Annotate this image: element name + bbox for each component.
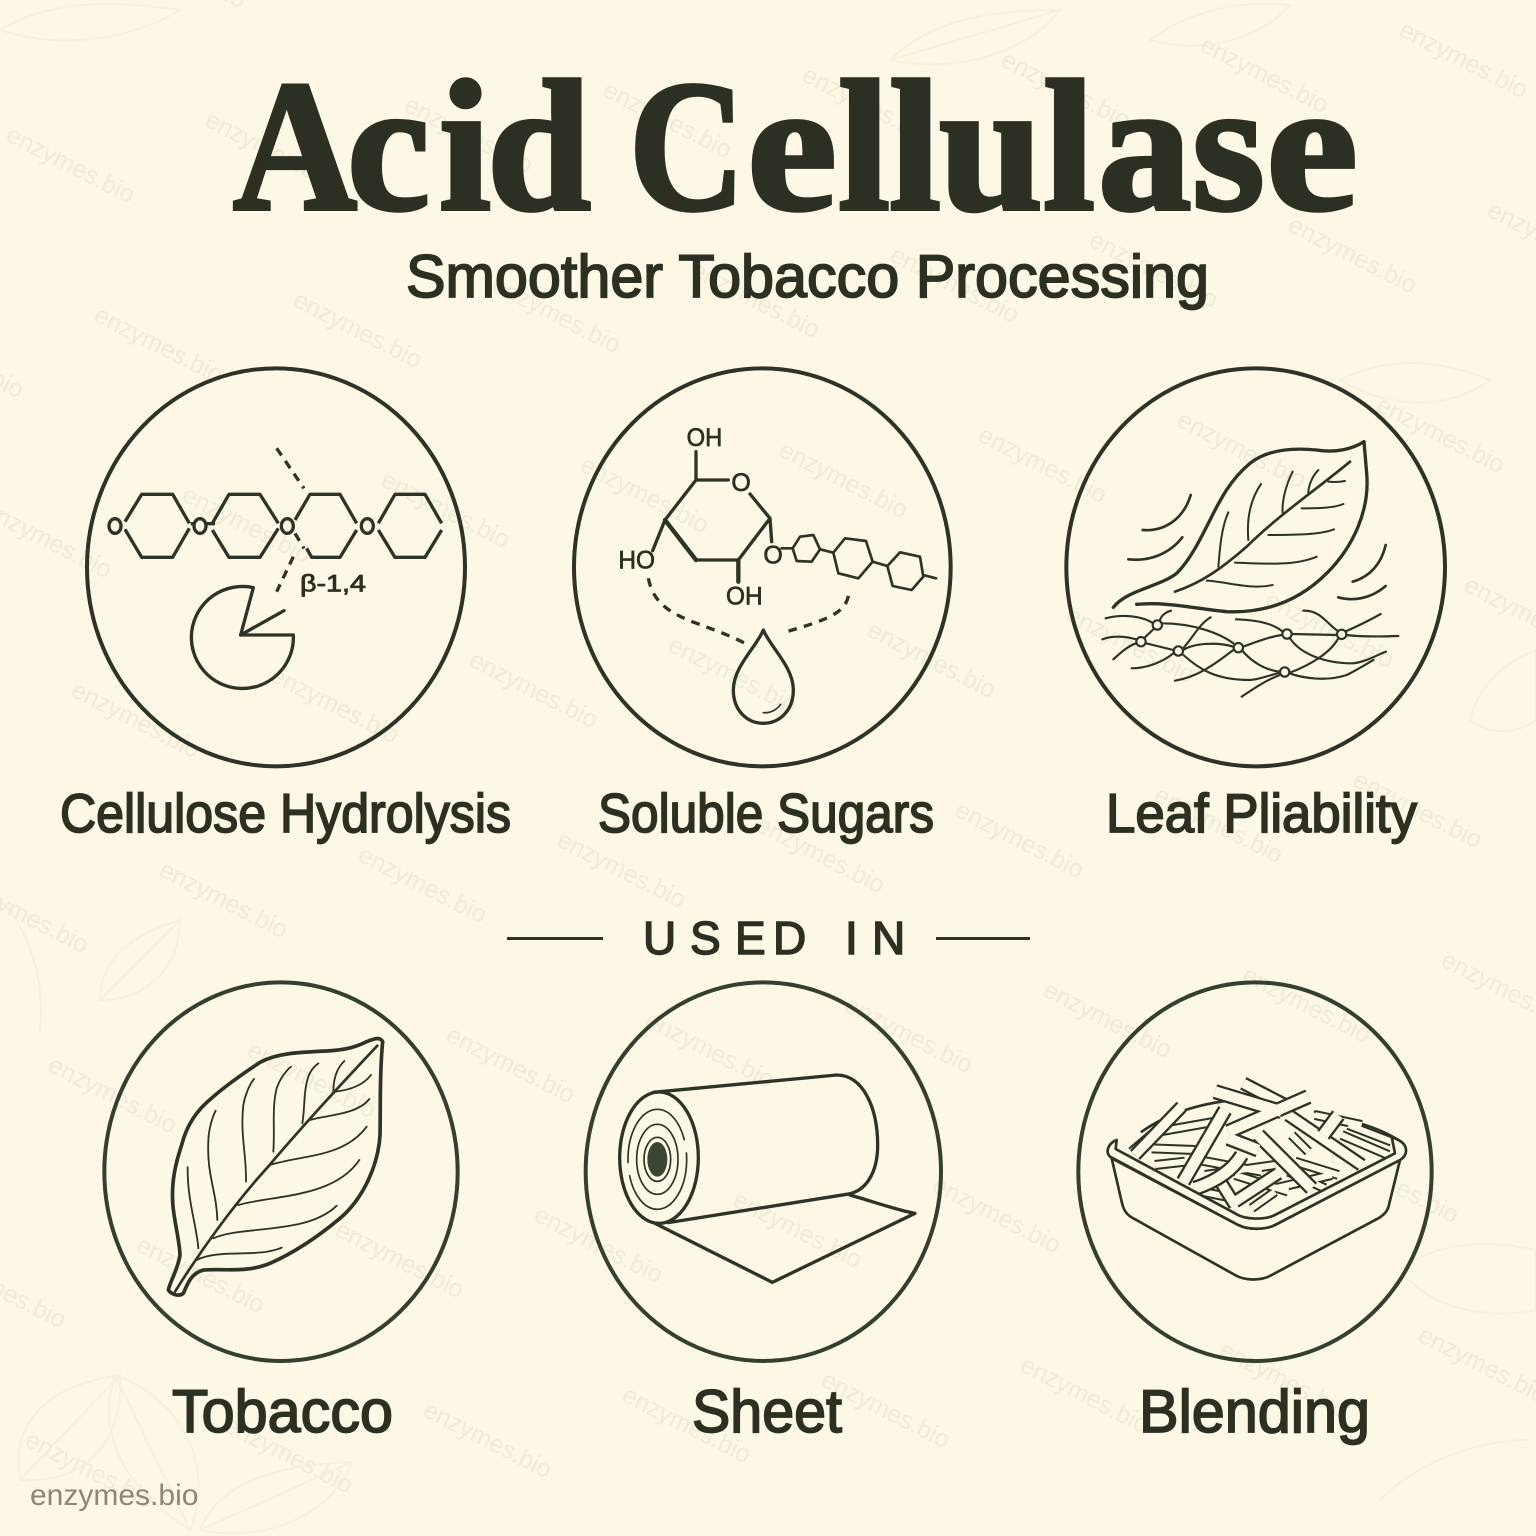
watermark pattern: enzymes.bio <box>840 991 978 1079</box>
icon: sugar molecule and water drop: O <box>731 469 751 497</box>
watermark pattern: enzymes.bio <box>1284 211 1422 299</box>
title: e <box>747 43 837 250</box>
watermark pattern: enzymes.bio <box>400 91 538 179</box>
watermark pattern: enzymes.bio <box>576 451 714 539</box>
watermark pattern: enzymes.bio <box>2 121 140 209</box>
watermark pattern: enzymes.bio <box>1326 1141 1464 1229</box>
watermark pattern: enzymes.bio <box>1395 16 1533 104</box>
watermark pattern: enzymes.bio <box>354 841 492 929</box>
watermark pattern: enzymes.bio <box>974 421 1112 509</box>
title: C <box>629 43 745 250</box>
watermark pattern: enzymes.bio <box>132 1231 270 1319</box>
icon: rolled sheet <box>586 982 941 1361</box>
watermark pattern: enzymes.bio <box>618 1381 756 1469</box>
watermark pattern: enzymes.bio <box>419 1396 557 1484</box>
watermark pattern: enzymes.bio <box>928 1171 1066 1259</box>
icon: flexing leaf over fibre network <box>1066 368 1445 766</box>
watermark pattern: enzymes.bio <box>687 256 825 344</box>
panel: soluble sugars <box>574 368 951 844</box>
watermark pattern: enzymes.bio <box>1349 766 1487 854</box>
icon: cellulose chain and enzyme: β-1,4 <box>300 571 366 598</box>
watermark pattern: enzymes.bio <box>1173 406 1311 494</box>
icon: sugar molecule and water drop <box>574 368 951 766</box>
panel: blending <box>1078 982 1432 1445</box>
brand mark: enzymes.bio <box>30 1479 198 1512</box>
watermark pattern: enzymes.bio <box>1150 781 1288 869</box>
watermark pattern: enzymes.bio <box>599 76 737 164</box>
watermark pattern: enzymes.bio <box>1016 1351 1154 1439</box>
watermark pattern: enzymes.bio <box>21 1426 159 1514</box>
watermark pattern: enzymes.bio <box>530 1201 668 1289</box>
panel: sheet <box>586 982 941 1445</box>
panel: leaf pliability <box>1066 368 1445 844</box>
watermark pattern: enzymes.bio <box>488 271 626 359</box>
title <box>233 43 1358 250</box>
icon: sugar molecule and water drop: OH <box>726 582 763 610</box>
icon: tray of shredded tobacco <box>1078 982 1432 1361</box>
watermark pattern: enzymes.bio <box>201 106 339 194</box>
watermark pattern: enzymes.bio <box>664 631 802 719</box>
title: cid <box>347 43 591 250</box>
label: blending: Blending <box>1139 1378 1370 1445</box>
watermark pattern: enzymes.bio <box>1372 391 1510 479</box>
watermark pattern: enzymes.bio <box>1196 31 1334 119</box>
watermark pattern: enzymes.bio <box>178 481 316 569</box>
label: leaf pliability: Leaf Pliability <box>1106 782 1417 844</box>
watermark pattern: enzymes.bio <box>67 676 205 764</box>
watermark pattern: enzymes.bio <box>243 1036 381 1124</box>
watermark pattern: enzymes.bio <box>1085 226 1223 314</box>
watermark pattern: enzymes.bio <box>266 661 404 749</box>
label: tobacco: Tobacco <box>172 1378 393 1445</box>
watermark pattern: enzymes.bio <box>641 1006 779 1094</box>
watermark pattern: enzymes.bio <box>729 1186 867 1274</box>
divider heading: used in: USED IN <box>643 912 905 964</box>
watermark pattern: enzymes.bio <box>1062 601 1200 689</box>
watermark pattern: enzymes.bio <box>155 856 293 944</box>
watermark pattern: enzymes.bio <box>997 46 1135 134</box>
watermark pattern: enzymes.bio <box>377 466 515 554</box>
icon: sugar molecule and water drop: HO <box>618 546 655 574</box>
title: A <box>233 43 357 250</box>
watermark pattern: enzymes.bio <box>863 616 1001 704</box>
watermark pattern: enzymes.bio <box>44 1051 182 1139</box>
watermark pattern: enzymes.bio <box>331 1216 469 1304</box>
title: llulas <box>838 43 1265 250</box>
icon: sugar molecule and water drop: OH <box>687 424 722 452</box>
watermark pattern: enzymes.bio <box>220 1411 358 1499</box>
watermark pattern: enzymes.bio <box>1238 961 1376 1049</box>
watermark pattern: enzymes.bio <box>553 826 691 914</box>
watermark pattern: enzymes.bio <box>1127 1156 1265 1244</box>
watermark pattern: enzymes.bio <box>90 301 228 389</box>
label: sheet: Sheet <box>692 1378 842 1445</box>
title: e <box>1266 43 1358 250</box>
watermark pattern: enzymes.bio <box>1215 1336 1353 1424</box>
panel: tobacco <box>104 982 458 1445</box>
watermark pattern: enzymes.bio <box>465 646 603 734</box>
icon: tobacco leaf <box>104 982 458 1361</box>
watermark pattern: enzymes.bio <box>951 796 1089 884</box>
watermark pattern: enzymes.bio <box>1039 976 1177 1064</box>
label: cellulose hydrolysis: Cellulose Hydrolysis <box>60 782 511 844</box>
panel: cellulose hydrolysis <box>60 368 511 844</box>
icon: cellulose chain and enzyme <box>87 368 465 766</box>
watermark pattern: enzymes.bio <box>442 1021 580 1109</box>
watermark pattern: enzymes.bio <box>886 241 1024 329</box>
watermark pattern: enzymes.bio <box>1261 586 1399 674</box>
watermark pattern: enzymes.bio <box>289 286 427 374</box>
watermark pattern: enzymes.bio <box>752 811 890 899</box>
watermark pattern: enzymes.bio <box>798 61 936 149</box>
watermark pattern: enzymes.bio <box>817 1366 955 1454</box>
watermark pattern: enzymes.bio <box>775 436 913 524</box>
subtitle: Smoother Tobacco Processing <box>406 243 1209 310</box>
label: soluble sugars: Soluble Sugars <box>598 782 934 844</box>
icon: sugar molecule and water drop: O <box>763 541 783 569</box>
